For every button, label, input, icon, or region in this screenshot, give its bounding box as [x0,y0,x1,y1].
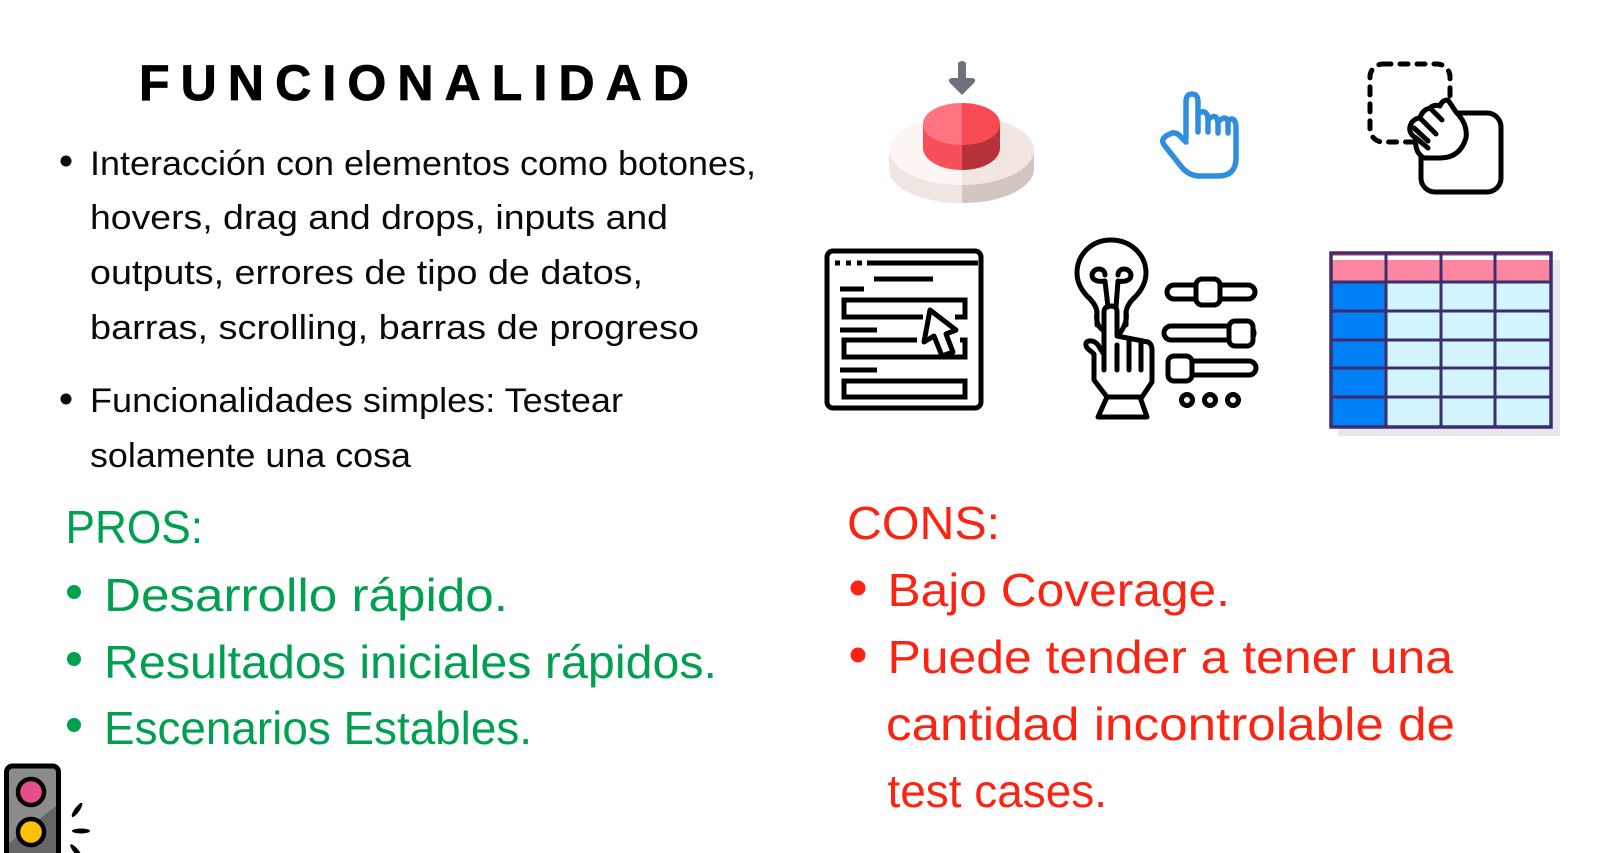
title: FUNCIONALIDAD [139,55,689,111]
bullet 2: Funcionalidades simples: Testear [90,382,623,420]
slider 1 [1167,279,1255,305]
panel: pros [66,501,717,754]
bullet 2: solamente una cosa [90,437,411,475]
slider dots [1182,394,1238,406]
bullet 1: outputs, errores de tipo de datos, [90,254,643,292]
icon: traffic light [6,766,90,853]
bullet 2 [60,382,623,475]
icon: light bulb, hand and sliders [1077,240,1256,417]
bullet 1 [60,145,756,347]
pros list [67,569,717,754]
pros heading: PROS: [66,501,203,553]
cons heading: CONS: [847,497,1000,549]
icon: spreadsheet table [1331,253,1560,436]
cons list: cantidad incontrolable de [886,698,1455,750]
cons list: Bajo Coverage. [888,564,1230,616]
icon: drag and drop [1370,64,1501,192]
icon: form with cursor [827,251,981,408]
bullet 1: hovers, drag and drops, inputs and [90,199,668,237]
pros list: Desarrollo rápido. [104,569,508,621]
bullet 1: barras, scrolling, barras de progreso [90,309,699,347]
slider 2 [1164,321,1254,346]
panel: cons [847,497,1455,817]
bullet 1: Interacción con elementos como botones, [90,145,756,183]
slider 3 [1168,356,1256,381]
pros list: Escenarios Estables. [104,702,532,754]
icon: blue pointing hand [1163,94,1236,176]
text block: functionality bullets [60,145,756,475]
pros list: Resultados iniciales rápidos. [104,636,717,688]
cons list: Puede tender a tener una [888,631,1453,683]
cons list: test cases. [888,765,1107,817]
cons list [850,564,1455,817]
icon: red push button [889,61,1034,203]
